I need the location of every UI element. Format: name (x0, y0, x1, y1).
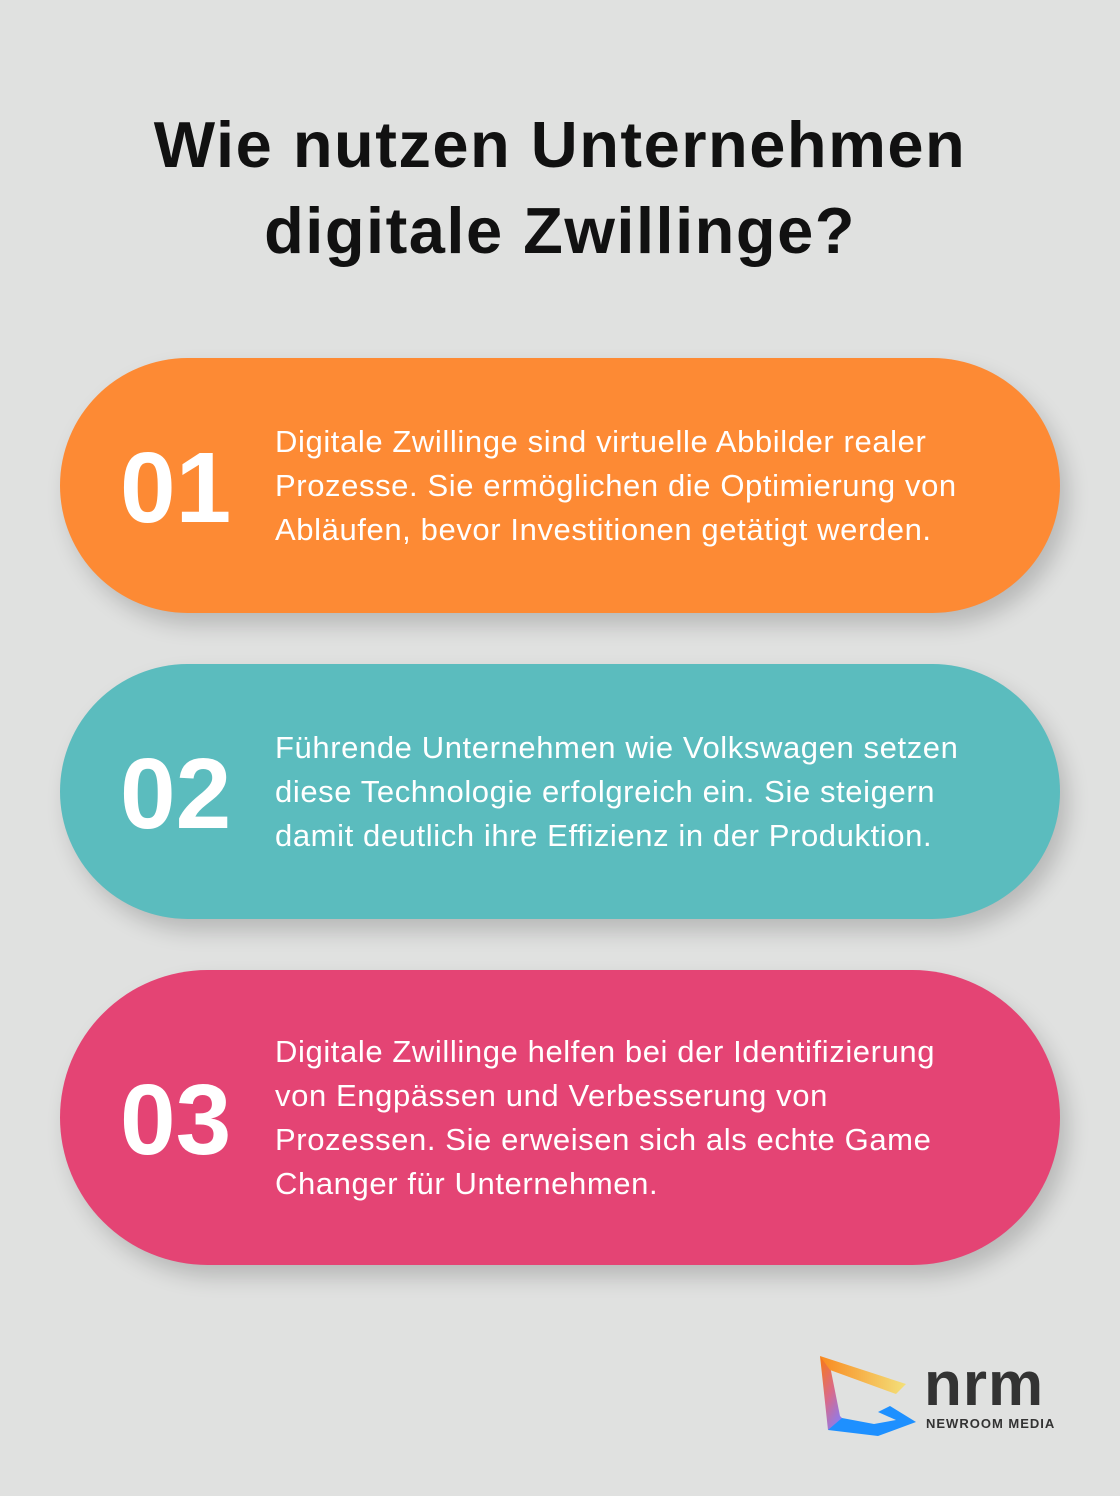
title: Wie nutzen Unternehmen (154, 108, 966, 181)
logo text: nrm (924, 1350, 1044, 1419)
text 01: Digitale Zwillinge sind virtuelle Abbilder realer (275, 424, 926, 459)
number 03: 03 (120, 1064, 231, 1176)
text 01: Prozesse. Sie ermöglichen die Optimierung von (275, 468, 957, 503)
panel: 02 (60, 664, 1060, 919)
text 02: diese Technologie erfolgreich ein. Sie steigern (275, 774, 935, 809)
text 03: Changer für Unternehmen. (275, 1166, 658, 1201)
logo (820, 1350, 1055, 1436)
icon: logo mark (820, 1356, 916, 1436)
text 02: damit deutlich ihre Effizienz in der Produktion. (275, 818, 932, 853)
text 01 (275, 424, 957, 547)
text 03: Digitale Zwillinge helfen bei der Identifizierung (275, 1034, 935, 1069)
title: digitale Zwillinge? (264, 194, 856, 267)
text 03 (275, 1034, 935, 1201)
panel: 03 (60, 970, 1060, 1265)
panel: 01 (60, 358, 1060, 613)
number 02: 02 (120, 738, 231, 850)
text 01: Abläufen, bevor Investitionen getätigt werden. (275, 512, 932, 547)
text 03: von Engpässen und Verbesserung von (275, 1078, 828, 1113)
text 02 (275, 730, 958, 853)
text 03: Prozessen. Sie erweisen sich als echte Game (275, 1122, 931, 1157)
number 01: 01 (120, 432, 231, 544)
title (154, 108, 966, 267)
logo: NEWROOM MEDIA (926, 1416, 1055, 1431)
text 02: Führende Unternehmen wie Volkswagen setzen (275, 730, 958, 765)
